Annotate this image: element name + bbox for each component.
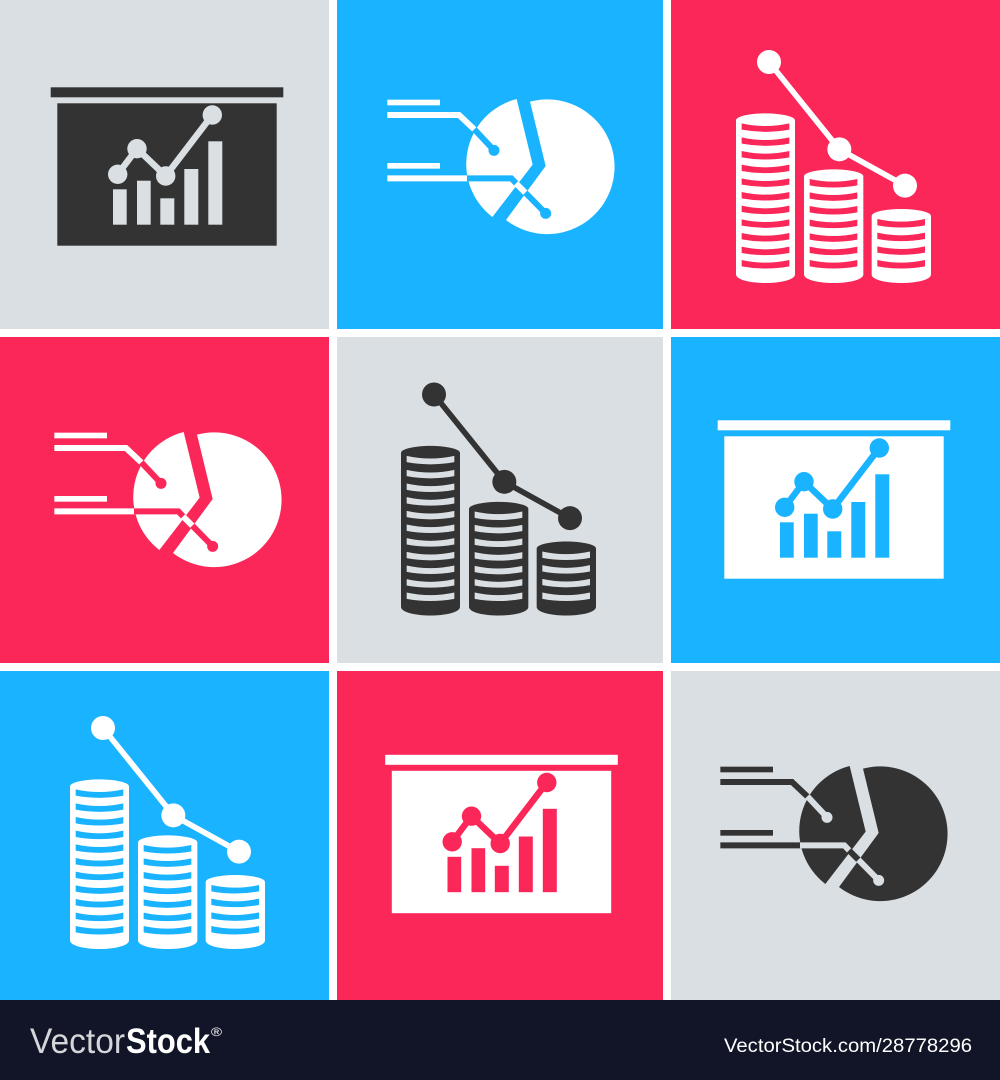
icon: presentation board with rising chart	[385, 755, 618, 913]
panel: gray presentation board	[0, 0, 329, 329]
panel: pink pie chart	[0, 337, 329, 663]
icon: presentation board with rising chart	[718, 420, 950, 579]
panel: blue pie chart	[337, 0, 663, 329]
icon: pie chart with callout lines	[54, 432, 282, 567]
image id text: VectorStock.com/28778296	[724, 1036, 972, 1057]
panel: gray coin stacks	[337, 337, 663, 663]
logo: VectorStock wordmark: Stock	[126, 1022, 210, 1061]
panel: blue presentation board	[671, 337, 1000, 663]
icon: presentation board with rising chart	[51, 87, 283, 246]
logo: VectorStock wordmark: Vector	[30, 1022, 125, 1061]
footer bar	[0, 1000, 1000, 1080]
icon: pie chart with callout lines	[720, 766, 948, 901]
panel: blue coin stacks	[0, 671, 329, 1000]
panel: pink presentation board	[337, 671, 663, 1000]
icon: coin stacks with falling line	[736, 50, 931, 283]
icon: coin stacks with falling line	[401, 382, 596, 615]
panel: pink coin stacks	[671, 0, 1000, 329]
logo: VectorStock wordmark: ®	[211, 1025, 222, 1039]
icon: coin stacks with falling line	[70, 716, 265, 949]
panel: gray pie chart	[671, 671, 1000, 1000]
icon: pie chart with callout lines	[387, 99, 615, 234]
logo: VectorStock wordmark	[30, 1022, 222, 1061]
